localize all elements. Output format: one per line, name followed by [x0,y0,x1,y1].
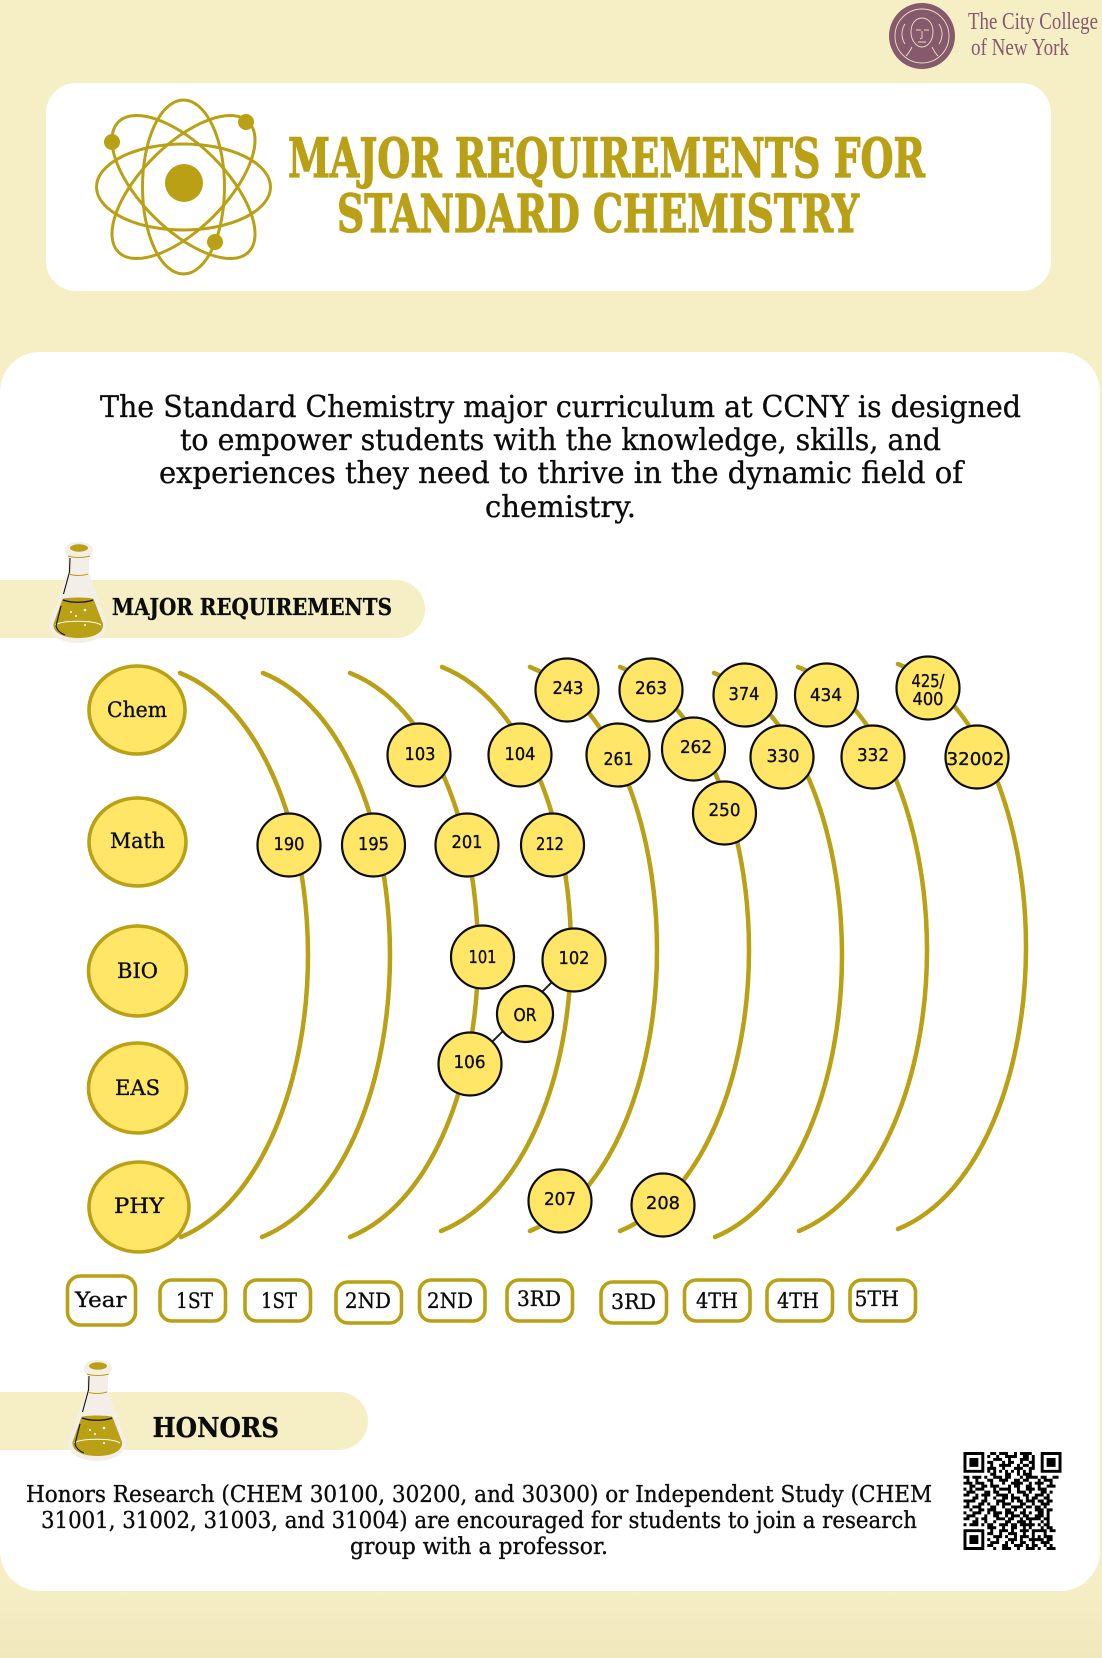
label: 5TH [850,1280,916,1321]
course 332: 332 [857,745,889,766]
course 101 [451,926,514,988]
label: 4TH [767,1280,832,1321]
course 207: 207 [544,1189,576,1210]
subject: BIO: BIO [117,959,158,983]
course 101: 101 [468,947,496,968]
subject: PHY: PHY [114,1194,165,1218]
honors paragraph: Honors Research (CHEM 30100, 30200, and 30300) or Independent Study (CHEM [26,1482,932,1508]
course 208: 208 [646,1193,680,1214]
intro paragraph: to empower students with the knowledge, skills, and [180,423,941,458]
panel: main content [0,352,1100,1591]
qr code [964,1452,1062,1550]
course 195: 195 [358,834,389,855]
course 106 [438,1032,502,1096]
course 201 [436,814,498,876]
course 201: 201 [452,832,482,853]
label: 1ST [160,1280,226,1321]
course 243 [536,658,598,722]
subject: Chem [89,666,185,754]
label: 4TH: 4TH [696,1289,738,1313]
icon: atom [89,92,278,282]
course 263: 263 [635,678,667,699]
course 261 [586,724,650,786]
banner heading: MAJOR REQUIREMENTS [112,593,392,621]
course 425/400: 425/ [912,671,945,692]
course 332 [842,726,904,788]
panel: header card [46,83,1051,291]
course 243: 243 [552,678,584,699]
chart: prerequisite flow [88,656,1026,1252]
course nodes [258,656,1008,1236]
subject: PHY [89,1162,189,1252]
course 263 [620,658,682,722]
course 262: 262 [680,737,712,758]
label: Year [68,1276,136,1325]
subject: Math [89,798,186,886]
label: 4TH [684,1280,750,1321]
label: 1ST: 1ST [261,1289,297,1313]
course 330: 330 [766,746,800,767]
course 425/400 [896,656,960,720]
course 103: 103 [404,744,436,765]
label: 3RD [601,1282,666,1323]
label: 2ND [420,1280,485,1321]
label: 5TH: 5TH [854,1287,899,1311]
subject: EAS [88,1043,186,1133]
course 425/400: 400 [912,689,944,710]
intro paragraph: experiences they need to thrive in the dynamic field of [159,456,965,491]
course 330 [750,726,814,788]
course 102 [542,928,606,992]
course 250 [693,782,756,844]
label: Year: Year [74,1288,128,1312]
course 374 [714,664,776,726]
subject: Chem: Chem [107,698,167,722]
course 208 [632,1174,694,1236]
year labels [68,1276,916,1325]
or node [497,986,553,1042]
course 250: 250 [708,800,740,821]
intro paragraph: The Standard Chemistry major curriculum at CCNY is designed [100,390,1021,425]
subject: Math: Math [110,829,165,853]
course 104: 104 [504,744,536,765]
course 262 [662,718,725,780]
course 261: 261 [604,749,634,770]
subject: EAS: EAS [115,1076,160,1100]
course 195 [342,814,405,876]
label: 3RD: 3RD [611,1290,656,1314]
logo text line 2: of New York [971,35,1069,61]
course 207 [528,1170,592,1232]
course 434 [795,664,858,726]
label: 2ND: 2ND [427,1289,473,1313]
course 212: 212 [536,834,564,855]
course 374: 374 [728,684,760,705]
course 32002: 32002 [946,749,1004,770]
intro paragraph [100,390,1021,525]
title line 2: STANDARD CHEMISTRY [337,184,860,245]
honors paragraph: group with a professor. [350,1534,608,1560]
icon: flask [49,542,107,643]
label: 3RD: 3RD [517,1287,561,1311]
course 104 [488,724,552,786]
label: 1ST [245,1280,310,1321]
honors paragraph: 31001, 31002, 31003, and 31004) are encouraged for students to join a research [41,1508,917,1534]
course 32002 [946,726,1008,788]
course 434: 434 [810,685,842,706]
label: 3RD [507,1280,572,1321]
banner heading: HONORS [152,1413,279,1444]
course 103 [388,724,450,786]
semester arcs [180,664,1026,1237]
label: 4TH: 4TH [777,1289,819,1313]
connector: 102 or 106 [470,960,574,1064]
intro paragraph: chemistry. [485,490,636,525]
honors paragraph [26,1482,932,1560]
label: 2ND: 2ND [345,1289,391,1313]
course 212 [521,814,584,876]
banner: honors [0,1360,368,1461]
label: 1ST: 1ST [176,1289,213,1313]
course 102: 102 [558,948,590,969]
logo seal [889,3,955,69]
or node: OR [514,1005,536,1026]
course 106: 106 [454,1052,486,1073]
logo: The City College of New York [889,3,1098,69]
icon: flask [68,1360,126,1461]
banner: major requirements [0,542,425,643]
course 190 [258,814,320,876]
label: 2ND [336,1282,402,1323]
subject: BIO [88,926,186,1016]
course 190: 190 [274,834,304,855]
